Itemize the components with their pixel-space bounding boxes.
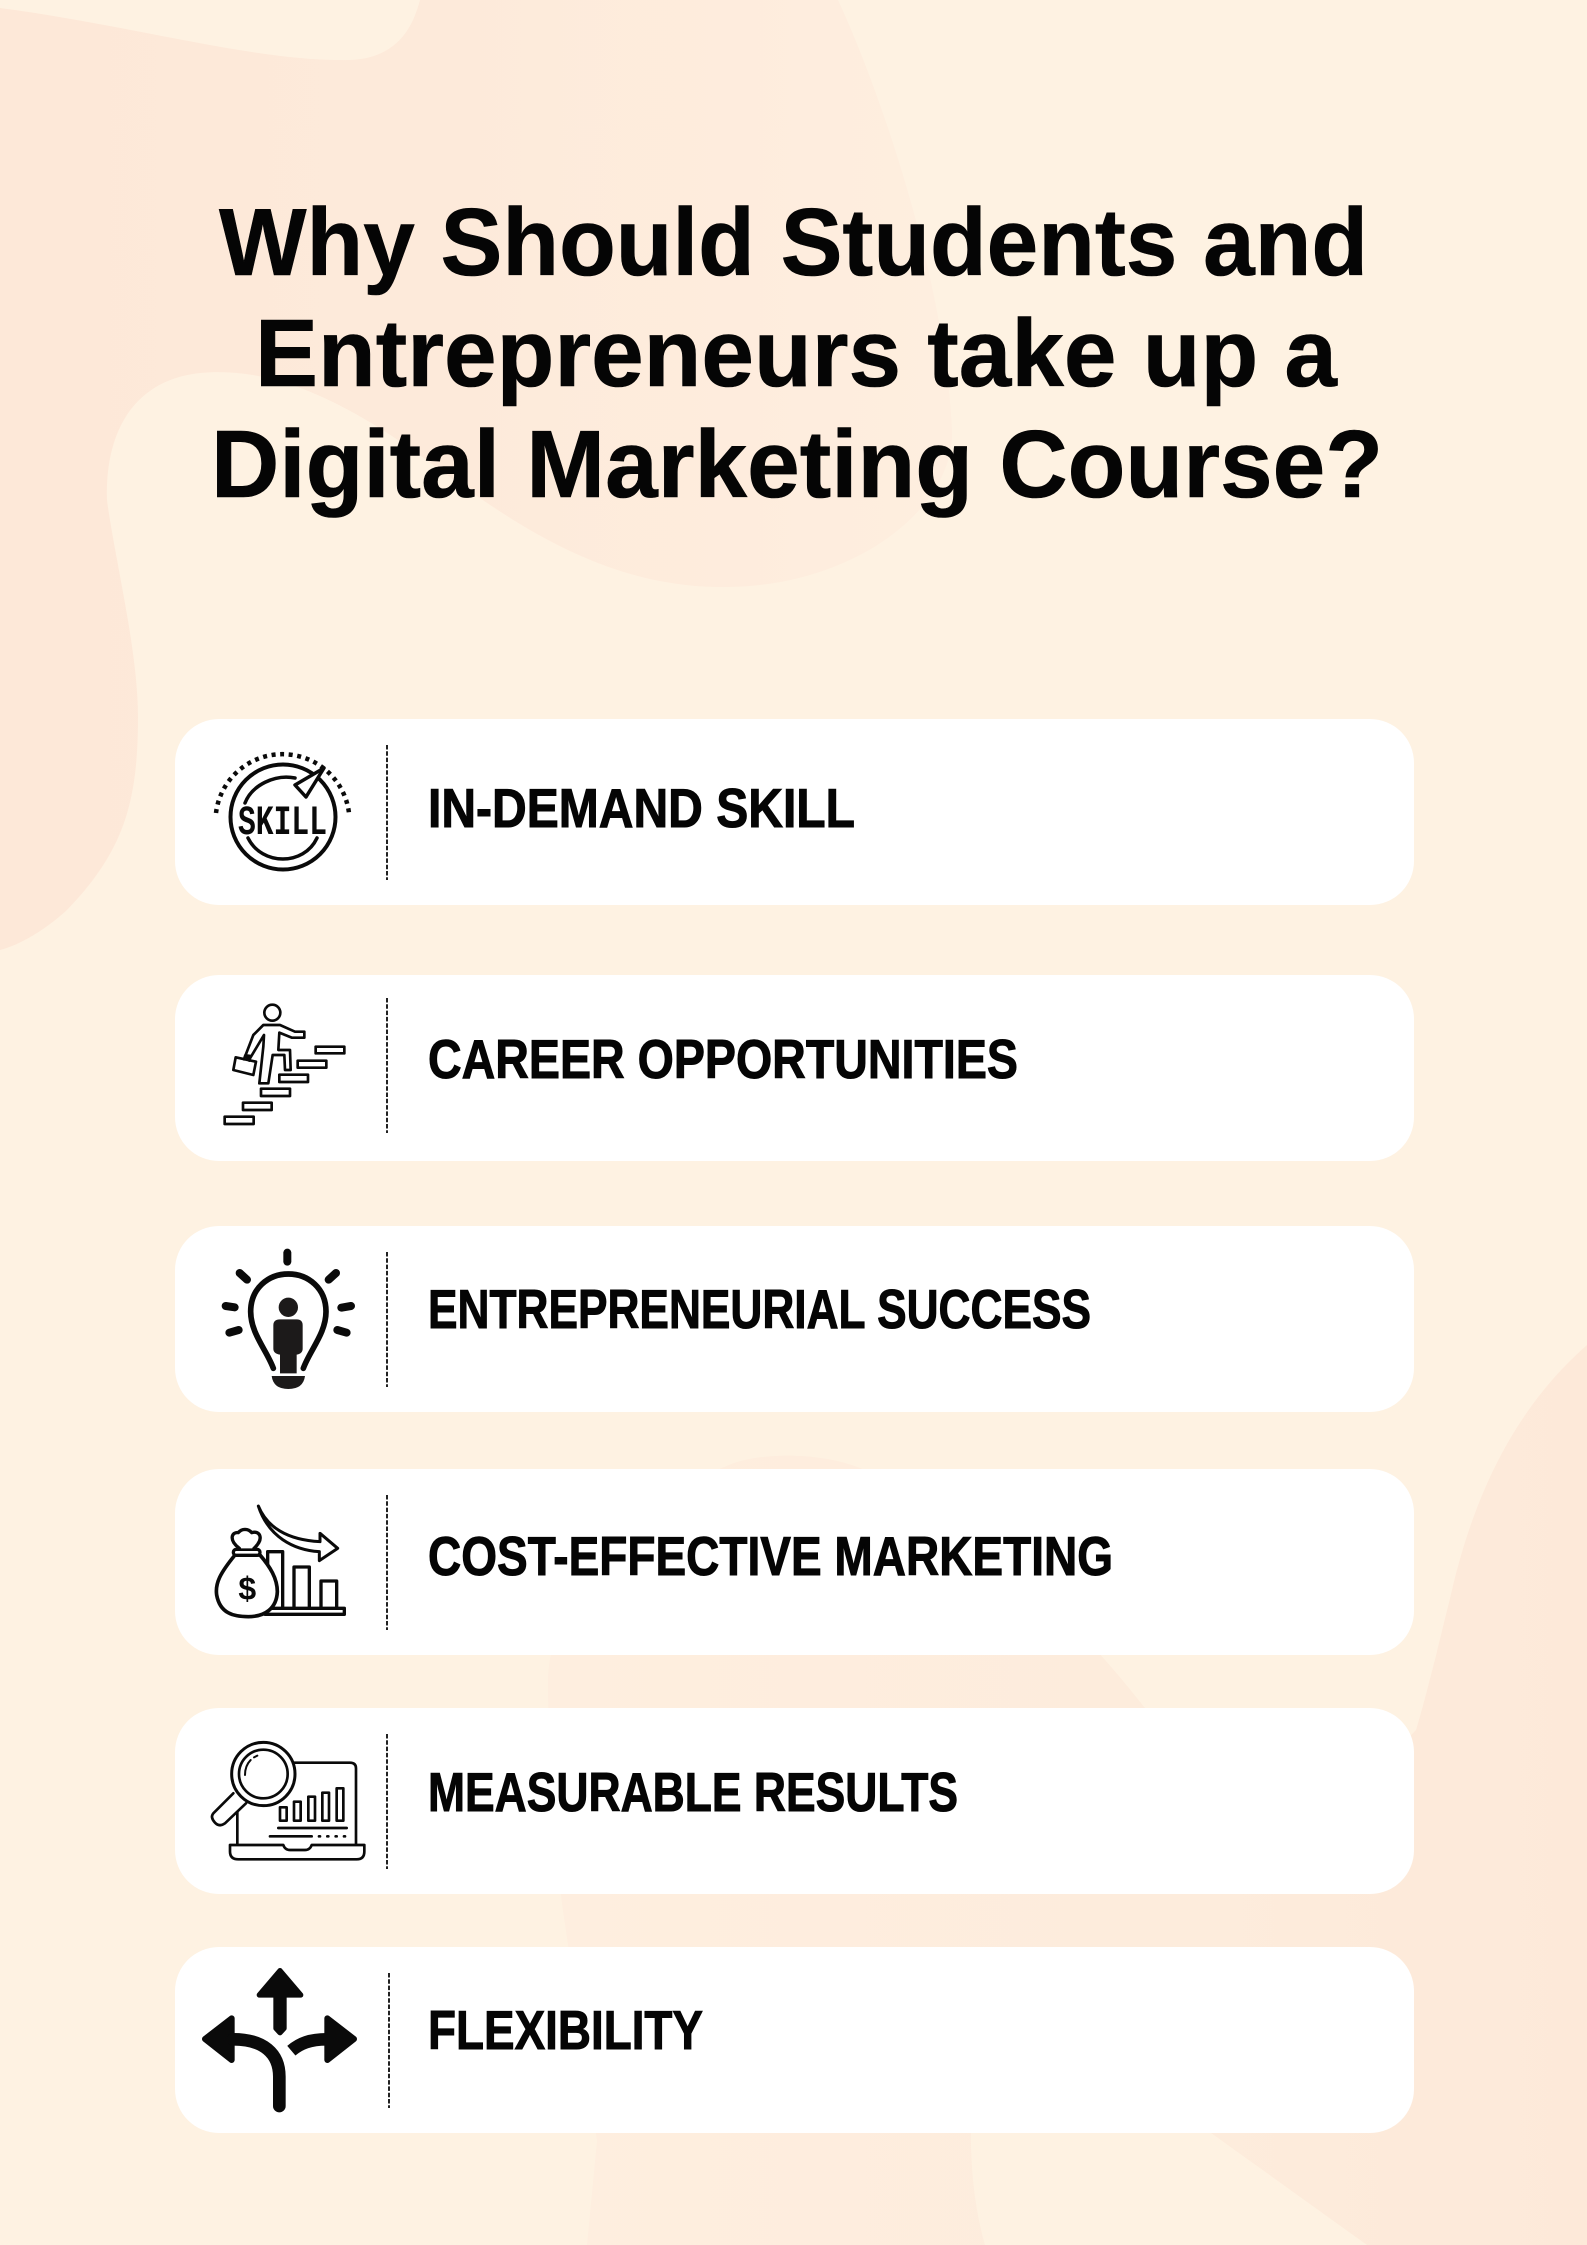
title (211, 189, 1383, 518)
panel: entrepreneurial success (175, 1226, 1414, 1412)
panel: flexibility (175, 1947, 1414, 2133)
panel: cost-effective marketing: COST-EFFECTIVE MARKETING (428, 1525, 1113, 1587)
icon: skill gauge (216, 754, 349, 870)
title: Digital Marketing Course? (211, 411, 1383, 518)
icon: light bulb with person (226, 1253, 351, 1389)
panel: career opportunities: CAREER OPPORTUNITIES (428, 1028, 1018, 1090)
panel: entrepreneurial success: ENTREPRENEURIAL SUCCESS (428, 1278, 1091, 1340)
icon: money bag with falling cost chart: $ (238, 1570, 256, 1606)
panel: career opportunities (175, 975, 1414, 1161)
panel: flexibility: FLEXIBILITY (428, 1999, 703, 2061)
panel: in-demand skill (175, 719, 1414, 905)
title: Entrepreneurs take up a (255, 300, 1338, 407)
icon: money bag with falling cost chart (216, 1506, 344, 1617)
icon: skill gauge: SKILL (238, 799, 327, 847)
title: Why Should Students and (219, 189, 1368, 296)
icon: person climbing stairs (225, 1005, 344, 1124)
panel: measurable results (175, 1708, 1414, 1894)
icon: three-way arrows (205, 1971, 354, 2106)
icon: laptop with magnifier (212, 1742, 364, 1859)
panel: in-demand skill: IN-DEMAND SKILL (428, 777, 855, 839)
panel: cost-effective marketing (175, 1469, 1414, 1655)
panel: measurable results: MEASURABLE RESULTS (428, 1761, 958, 1823)
